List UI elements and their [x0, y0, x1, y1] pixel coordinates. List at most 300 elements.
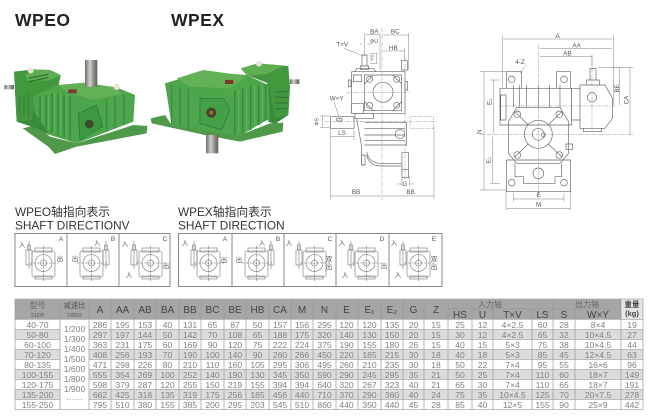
- table: data rows: 370: [339, 390, 354, 400]
- table: data rows: 125: [535, 390, 550, 400]
- table: data rows: 10×4.5: [585, 330, 611, 340]
- table: data rows: 640: [317, 380, 332, 390]
- table: data rows: 90: [208, 340, 217, 350]
- table header: BE: [228, 305, 242, 316]
- table: data rows: 27: [627, 330, 637, 340]
- table: data rows: 394: [273, 380, 287, 390]
- table: data rows: 60-100: [24, 340, 51, 350]
- table: data rows: 363: [93, 340, 107, 350]
- title: WPEX: WPEX: [171, 10, 224, 30]
- heading: WPEO shaft direction: WPEO轴指向表示: [15, 205, 110, 219]
- table: data rows: 440: [339, 400, 354, 410]
- table: data rows: 256: [228, 390, 242, 400]
- table: data rows: 5×3: [505, 350, 520, 360]
- table header: HS: [453, 310, 467, 321]
- panel: WPEX shaft directions: 出: [431, 262, 437, 271]
- table: reduction ratios: 1/300: [64, 334, 85, 344]
- table: data rows: 155: [160, 400, 175, 410]
- table header: [30, 299, 640, 321]
- table header: LS: [536, 310, 549, 321]
- table: reduction ratios: 1/900: [64, 384, 85, 394]
- table: data rows: 15: [431, 340, 441, 350]
- table: data rows: 110: [536, 370, 550, 380]
- table header: BB: [183, 305, 197, 316]
- table: data rows: 135: [385, 320, 399, 330]
- panel: WPEX shaft directions: 出: [221, 255, 227, 264]
- table header: S: [561, 310, 568, 321]
- table header: 重量: [624, 299, 640, 309]
- table: data rows: 450: [317, 350, 332, 360]
- table: data rows: 40: [163, 320, 172, 330]
- table: reduction ratios: ……: [66, 392, 83, 402]
- table: data rows: 295: [385, 370, 399, 380]
- table: data rows: 75: [455, 390, 465, 400]
- table: data rows: 18×7: [588, 370, 608, 380]
- table: data rows: 290: [339, 370, 354, 380]
- table: data rows: 188: [273, 330, 287, 340]
- table: data rows: 30: [455, 330, 465, 340]
- drawing: side view with dimensions: ΦS: [314, 117, 320, 126]
- panel: WPEX shaft directions: E: [432, 236, 437, 243]
- table: data rows: 215: [385, 350, 399, 360]
- table: data rows: 90: [253, 350, 262, 360]
- table: data rows: 130: [250, 370, 265, 380]
- table: data rows: 286: [93, 320, 107, 330]
- table: data rows: 65: [208, 320, 217, 330]
- table: data rows: 226: [138, 360, 152, 370]
- table: data rows: 40-70: [27, 320, 49, 330]
- table: data rows: 18×7: [588, 380, 608, 390]
- table header: BA: [161, 305, 174, 316]
- table: data rows: 5×3: [505, 340, 520, 350]
- table: data rows: 318: [138, 390, 152, 400]
- table: data rows: 40: [455, 350, 465, 360]
- table: data rows: 12: [478, 320, 487, 330]
- table header: 入力轴: [478, 299, 502, 309]
- panel: WPEX shaft directions: 双: [326, 255, 333, 263]
- table: data rows: 379: [115, 380, 130, 390]
- panel: WPEX shaft directions: B: [276, 236, 280, 243]
- table header: 减速比: [63, 300, 86, 310]
- drawing: side view with dimensions: BC: [391, 28, 400, 35]
- table: data rows: 155: [250, 380, 265, 390]
- drawing: front view with dimensions: A: [556, 33, 561, 40]
- table header: ratio: [67, 310, 82, 319]
- table: data rows: 120-175: [22, 380, 53, 390]
- table: data rows: 15: [478, 340, 487, 350]
- heading: WPEO shaft direction: SHAFT DIRECTIONV: [15, 218, 130, 232]
- table: data rows: 20: [409, 320, 418, 330]
- table: data rows: 408: [93, 350, 107, 360]
- table: data rows: 190: [183, 350, 197, 360]
- table: data rows: 150: [385, 330, 399, 340]
- table: data rows: 266: [295, 350, 309, 360]
- table: data rows: 10×4.5: [585, 340, 611, 350]
- table: data rows: [22, 320, 639, 410]
- table: data rows: 662: [93, 390, 107, 400]
- table: data rows: 175: [138, 340, 152, 350]
- table header: G: [410, 305, 418, 316]
- table: reduction ratios: [64, 324, 85, 402]
- table: data rows: 75: [253, 340, 262, 350]
- panel: WPEX shaft directions: D: [380, 236, 385, 243]
- table: data rows: 45: [409, 400, 418, 410]
- table: data rows: 323: [385, 380, 399, 390]
- table: data rows: 96: [627, 360, 637, 370]
- table: data rows: 80: [163, 360, 172, 370]
- table: data rows: 360: [385, 390, 399, 400]
- table: data rows: 70-120: [24, 350, 51, 360]
- table: data rows: 21: [431, 370, 441, 380]
- table header: 出力轴: [575, 299, 599, 309]
- table: data rows: 195: [115, 320, 130, 330]
- table: data rows: 510: [295, 400, 309, 410]
- panel: WPEX shaft directions: 入: [259, 240, 266, 247]
- table: data rows: 80-135: [24, 360, 51, 370]
- table: data rows: 30: [478, 380, 487, 390]
- table: data rows: 278: [625, 390, 639, 400]
- drawing: front view with dimensions: [477, 33, 633, 210]
- table: data rows: 203: [250, 400, 265, 410]
- table header: BC: [206, 305, 219, 316]
- table: data rows: 555: [93, 370, 107, 380]
- table: data rows: 65: [559, 380, 569, 390]
- table: data rows: 25: [455, 320, 465, 330]
- table: data rows: 28: [559, 320, 569, 330]
- table: data rows: 442: [625, 400, 639, 410]
- table: data rows: 40: [409, 380, 418, 390]
- table: data rows: 32: [559, 330, 569, 340]
- table: data rows: 185: [362, 350, 377, 360]
- table: data rows: 306: [295, 360, 309, 370]
- panel: WPEX shaft directions: 双: [431, 255, 438, 263]
- table: data rows: 44: [627, 340, 637, 350]
- drawing: front view with dimensions: 4-Z: [515, 59, 525, 66]
- table: data rows: 25×9: [588, 400, 608, 410]
- table: data rows: 160: [228, 360, 242, 370]
- table: data rows: 12×4.5: [585, 350, 611, 360]
- table: data rows: 60: [538, 320, 547, 330]
- panel: WPEO shaft directions: 入: [19, 242, 26, 249]
- table: data rows: 180: [385, 340, 399, 350]
- table: data rows: 95: [538, 360, 547, 370]
- table: data rows: 70: [559, 390, 569, 400]
- drawing: side view with dimensions: G: [403, 181, 408, 188]
- table: data rows: 590: [317, 370, 332, 380]
- table: data rows: 65: [455, 380, 465, 390]
- table: data rows: 385: [183, 400, 197, 410]
- table header: T×V: [503, 310, 522, 321]
- table: data rows: 155: [535, 400, 550, 410]
- panel: WPEO shaft directions: A: [59, 236, 64, 243]
- table: data rows: 45: [559, 350, 569, 360]
- table: data rows: 120: [160, 380, 175, 390]
- table: data rows: 295: [228, 400, 242, 410]
- table: data rows: 15: [431, 320, 441, 330]
- table header: size: [31, 310, 44, 319]
- table: data rows: 18: [431, 360, 441, 370]
- table: data rows: 350: [362, 400, 377, 410]
- table: data rows: 190: [339, 340, 354, 350]
- table: data rows: 55: [559, 360, 569, 370]
- table: data rows: 287: [138, 380, 152, 390]
- table: data rows: 269: [138, 370, 152, 380]
- table: data rows: 142: [183, 330, 197, 340]
- table: data rows: 197: [115, 330, 130, 340]
- drawing: front view with dimensions: E₁: [486, 157, 493, 163]
- table: data rows: 210: [183, 360, 197, 370]
- table: data rows: 40: [478, 400, 487, 410]
- table: reduction ratios: 1/200: [64, 324, 85, 334]
- table: data rows: 75: [538, 340, 547, 350]
- table: data rows: 100: [160, 370, 175, 380]
- table: data rows: 24: [431, 390, 441, 400]
- table header: CA: [273, 305, 287, 316]
- table: data rows: 510: [115, 400, 130, 410]
- table: data rows: 219: [228, 380, 242, 390]
- table: data rows: 110: [206, 360, 220, 370]
- table: data rows: 16×6: [588, 360, 608, 370]
- table: data rows: 157: [273, 320, 287, 330]
- table: data rows: 267: [362, 380, 377, 390]
- table header: Z: [433, 305, 439, 316]
- table: data rows: 260: [339, 360, 354, 370]
- title: WPEO: WPEO: [15, 10, 70, 30]
- panel: WPEO shaft directions: B: [111, 236, 115, 243]
- drawing: front view with dimensions: AA: [572, 42, 582, 49]
- table: data rows: 175: [205, 390, 220, 400]
- table: data rows: 598: [93, 380, 107, 390]
- table: data rows: 440: [295, 390, 309, 400]
- table: data rows: 50-80: [27, 330, 49, 340]
- drawing: side view with dimensions: BA: [370, 28, 379, 35]
- drawing: side view with dimensions: W×Y: [330, 96, 344, 103]
- table: data rows: 471: [93, 360, 107, 370]
- photo: WPEO gearbox: [4, 60, 147, 154]
- table: data rows: 256: [115, 350, 130, 360]
- drawing: side view with dimensions: ΦU: [370, 39, 378, 45]
- table: data rows: 70: [163, 350, 172, 360]
- table: data rows: 175: [295, 330, 309, 340]
- table: data rows: 795: [93, 400, 107, 410]
- panel: WPEO shaft directions: 入: [94, 240, 101, 247]
- table header: A: [97, 305, 104, 316]
- drawing: front view with dimensions: E₂: [487, 98, 494, 105]
- panel: WPEX shaft directions: 出: [236, 255, 242, 264]
- table: data rows: 7×4: [505, 380, 520, 390]
- table: data rows: 231: [115, 340, 130, 350]
- panel: WPEO shaft directions: [15, 234, 170, 286]
- table: data rows: 131: [183, 320, 197, 330]
- panel: WPEX shaft directions: 出: [326, 262, 332, 271]
- table: data rows: 35: [409, 370, 418, 380]
- table: data rows: 295: [317, 320, 332, 330]
- table: data rows: 18: [431, 350, 441, 360]
- heading: WPEX shaft direction: SHAFT DIRECTION: [178, 218, 285, 232]
- table: data rows: 298: [115, 360, 130, 370]
- table: data rows: 191: [625, 380, 639, 390]
- table: data rows: 30: [409, 350, 418, 360]
- table: data rows: 35: [478, 390, 487, 400]
- panel: WPEO shaft directions: 出: [163, 261, 169, 270]
- table: data rows: 120: [339, 320, 354, 330]
- table header: AB: [138, 305, 152, 316]
- table: data rows: 860: [317, 400, 332, 410]
- table: data rows: 21: [431, 380, 441, 390]
- table: data rows: 290: [362, 390, 377, 400]
- table: data rows: 50: [455, 370, 465, 380]
- drawing: side view with dimensions: [314, 28, 437, 200]
- table: data rows: 120: [228, 340, 242, 350]
- table: data rows: 65: [253, 330, 262, 340]
- panel: WPEO shaft directions: 入: [126, 272, 133, 279]
- table: data rows: 8×4: [591, 320, 606, 330]
- table: data rows: 100-155: [22, 370, 53, 380]
- table: data rows: 140: [228, 350, 242, 360]
- table: data rows: 25: [478, 370, 487, 380]
- table: data rows: 90: [559, 400, 569, 410]
- table: data rows: 155: [362, 340, 377, 350]
- table: data rows: 190: [228, 370, 242, 380]
- drawing: front view with dimensions: N: [477, 129, 484, 134]
- panel: WPEX shaft directions: [178, 234, 442, 286]
- table: reduction ratios: 1/800: [64, 374, 85, 384]
- panel: WPEX shaft directions: 出: [381, 261, 387, 270]
- table: dimensions: [15, 299, 643, 410]
- table: data rows: 20: [409, 330, 418, 340]
- table header: E₂: [387, 305, 397, 316]
- panel: WPEX shaft directions: 入: [286, 240, 293, 247]
- table: data rows: 222: [273, 340, 287, 350]
- drawing: side view with dimensions: HB: [389, 45, 398, 52]
- table: data rows: 169: [183, 340, 197, 350]
- table header: AA: [116, 305, 129, 316]
- heading: WPEO shaft direction: [15, 205, 130, 232]
- table: data rows: 135-200: [22, 390, 53, 400]
- table: data rows: 30: [409, 360, 418, 370]
- table: data rows: 120: [362, 320, 377, 330]
- table: data rows: 320: [317, 330, 332, 340]
- table: data rows: 140: [339, 330, 354, 340]
- table: data rows: 425: [115, 390, 130, 400]
- drawing: side view with dimensions: BB: [406, 189, 415, 196]
- drawing: front view with dimensions: M: [536, 201, 541, 208]
- panel: WPEX shaft directions: 入: [339, 240, 346, 247]
- table: data rows: 22: [478, 360, 487, 370]
- table: data rows: 260: [273, 350, 287, 360]
- table: data rows: 100: [205, 350, 220, 360]
- table: data rows: 440: [385, 400, 399, 410]
- panel: WPEX shaft directions: C: [328, 236, 333, 243]
- table: data rows: 320: [339, 380, 354, 390]
- table: data rows: 10×4.5: [499, 390, 526, 400]
- panel: WPEX shaft directions: 入: [182, 240, 189, 247]
- drawing: side view with dimensions: HS: [369, 55, 374, 61]
- table: data rows: 85: [538, 350, 547, 360]
- table: data rows: 15: [431, 330, 441, 340]
- table: reduction ratios: 1/400: [64, 344, 85, 354]
- panel: WPEX shaft directions: 入: [395, 272, 402, 279]
- table: data rows: 130: [362, 330, 377, 340]
- table: data rows: 345: [273, 370, 287, 380]
- table: data rows: 20×7.5: [585, 390, 611, 400]
- panel: WPEO shaft directions: 出: [57, 254, 63, 263]
- table: data rows: 140: [205, 370, 220, 380]
- table: data rows: 495: [317, 360, 332, 370]
- table: data rows: 375: [317, 340, 332, 350]
- table header: E₁: [364, 305, 375, 316]
- table: data rows: 185: [250, 390, 265, 400]
- table: data rows: 18: [478, 350, 487, 360]
- drawing: side view with dimensions: T×V: [336, 42, 349, 49]
- table: data rows: 710: [317, 390, 332, 400]
- table: data rows: 220: [339, 350, 354, 360]
- panel: WPEX shaft directions: 入: [391, 240, 398, 247]
- drawing: front view with dimensions: BE: [614, 84, 621, 93]
- table: data rows: 50: [455, 360, 465, 370]
- table: data rows: 297: [93, 330, 107, 340]
- table: data rows: 4×2.5: [502, 330, 524, 340]
- table: data rows: 110: [536, 380, 550, 390]
- drawing: side view with dimensions: BB: [352, 189, 360, 196]
- table header: N: [321, 305, 328, 316]
- table: data rows: 40: [409, 390, 418, 400]
- table header: W×Y: [587, 310, 609, 321]
- table: data rows: 456: [273, 390, 287, 400]
- table: reduction ratios: 1/600: [64, 364, 85, 374]
- table: data rows: 7×4: [505, 370, 520, 380]
- table header: 型号: [30, 301, 46, 310]
- table: data rows: 319: [183, 390, 197, 400]
- table header: (kg): [625, 309, 639, 318]
- table: data rows: 65: [538, 330, 547, 340]
- table: data rows: 245: [362, 370, 377, 380]
- table: data rows: 12: [478, 330, 487, 340]
- panel: WPEO shaft directions: 入: [122, 241, 129, 248]
- table: data rows: 135: [160, 390, 175, 400]
- heading: WPEX shaft direction: [178, 205, 285, 232]
- table: data rows: 354: [115, 370, 130, 380]
- table: data rows: 108: [228, 330, 242, 340]
- drawing: side view with dimensions: LS: [338, 130, 346, 137]
- drawing: front view with dimensions: CA: [623, 95, 630, 104]
- table: data rows: 295: [273, 360, 287, 370]
- table: data rows: 12×5: [503, 400, 522, 410]
- table: data rows: 7×4: [505, 360, 520, 370]
- table: data rows: 210: [362, 360, 377, 370]
- table: reduction ratios: 1/500: [64, 354, 85, 364]
- photo: WPEX gearbox: [151, 61, 299, 153]
- table: data rows: 144: [138, 330, 152, 340]
- table: data rows: 252: [183, 370, 197, 380]
- table: data rows: 350: [295, 370, 309, 380]
- table header: E: [343, 305, 350, 316]
- table: data rows: 63: [627, 350, 637, 360]
- table: data rows: 60: [163, 340, 172, 350]
- panel: WPEO shaft directions: 出: [72, 254, 78, 263]
- table: data rows: 193: [138, 350, 152, 360]
- table: data rows: 545: [273, 400, 287, 410]
- table: data rows: 28: [431, 400, 441, 410]
- table: data rows: 149: [625, 370, 639, 380]
- table: data rows: 50: [253, 320, 262, 330]
- panel: WPEX shaft directions: 入: [342, 272, 349, 279]
- panel: WPEX shaft directions: A: [223, 236, 228, 243]
- table: data rows: 87: [230, 320, 240, 330]
- table: data rows: 50: [163, 330, 172, 340]
- table: data rows: 38: [559, 340, 569, 350]
- heading: WPEX shaft direction: WPEX轴指向表示: [178, 205, 272, 219]
